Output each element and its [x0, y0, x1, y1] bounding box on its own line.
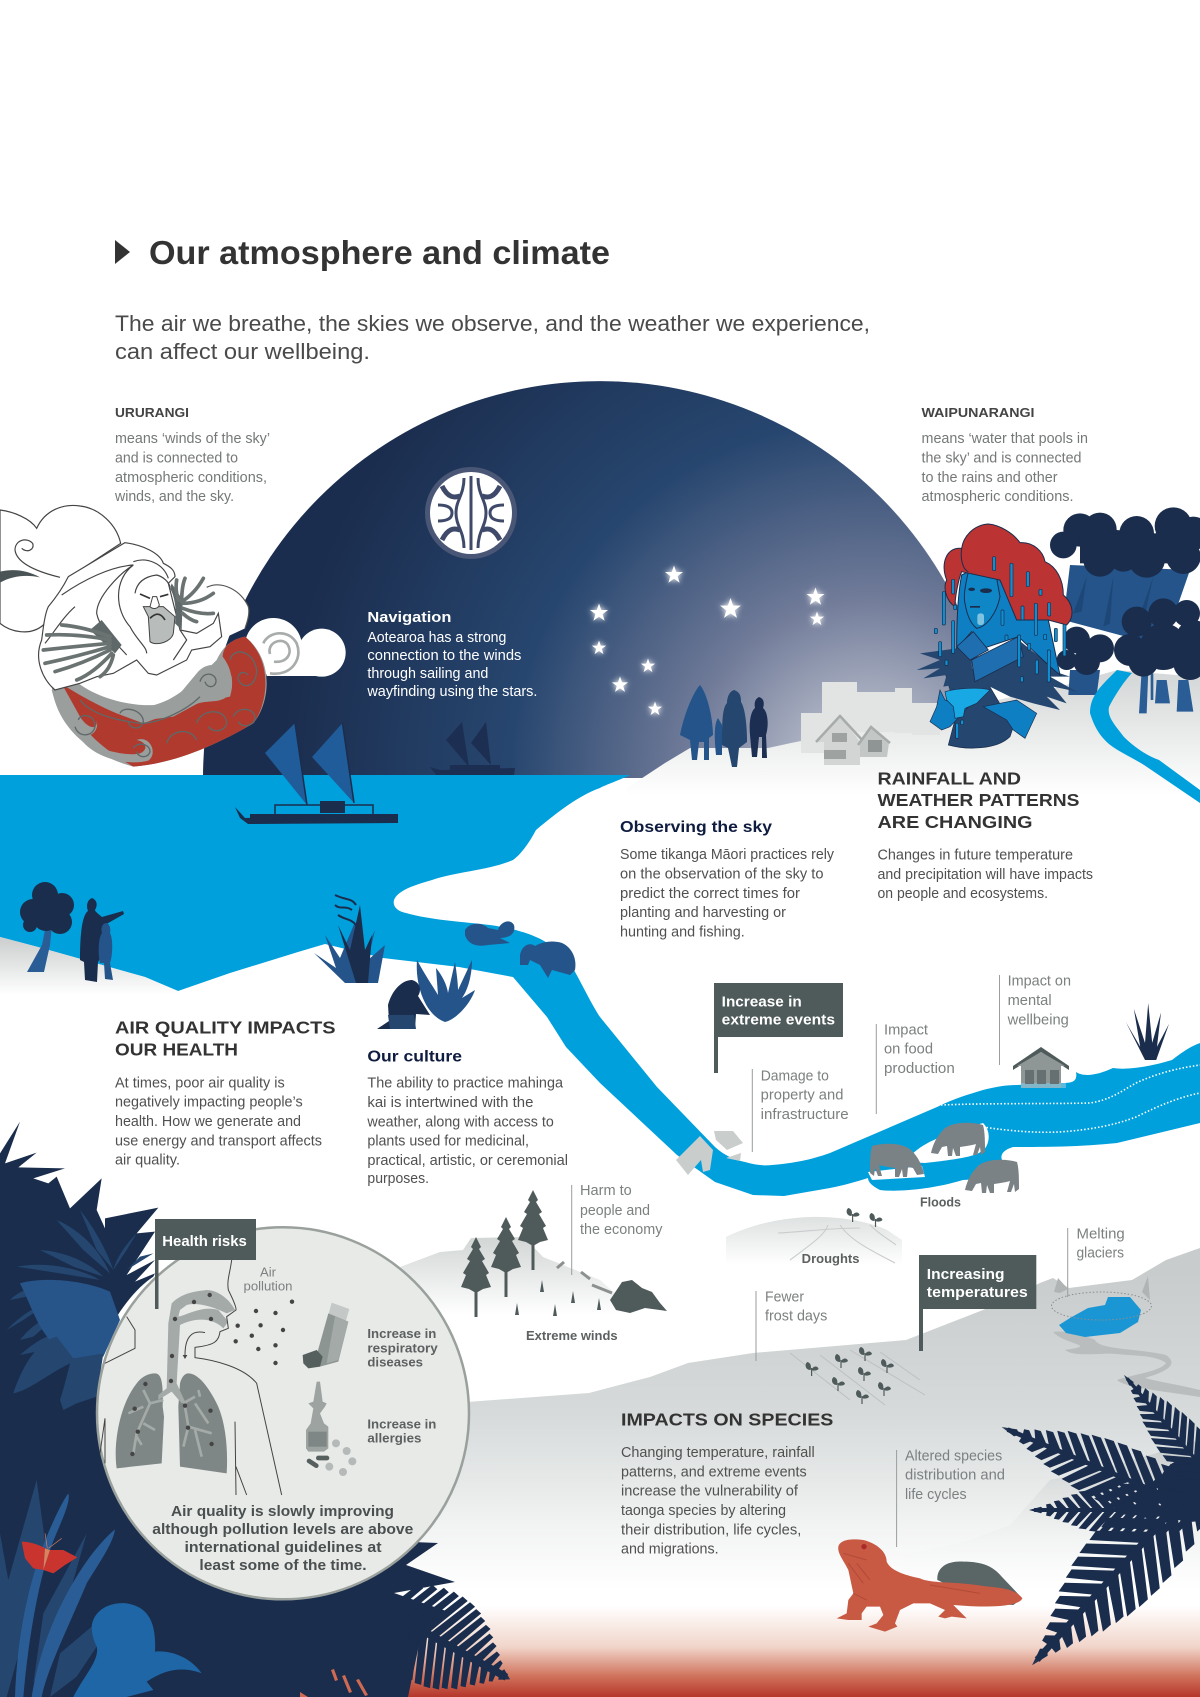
Rainfall heading and text: WEATHER PATTERNS: [878, 790, 1080, 810]
annotation: damage: Damage to: [761, 1068, 829, 1084]
large leaf: [20, 1280, 120, 1358]
Ururangi text: URURANGI: [115, 405, 189, 420]
side labels: Increase in: [367, 1418, 436, 1432]
flax by river: [1126, 1003, 1169, 1060]
Ururangi text: and is connected to: [115, 450, 238, 466]
Impacts on species text: and migrations.: [621, 1542, 719, 1558]
Ururangi text: atmospheric conditions,: [115, 470, 267, 486]
Our culture text: The ability to practice mahinga: [367, 1076, 564, 1092]
lower leaf: [13, 1337, 103, 1410]
key message: international guidelines at: [184, 1539, 382, 1556]
health risks circle: [97, 1227, 469, 1599]
Navigation text: wayfinding using the stars.: [366, 684, 537, 700]
Impacts on species text: patterns, and extreme events: [621, 1464, 807, 1480]
flag: increase in extreme events: extreme events: [722, 1012, 835, 1028]
rain streaks: [1073, 577, 1153, 633]
inhaler: [303, 1303, 349, 1368]
Air quality heading and text: OUR HEALTH: [115, 1040, 238, 1060]
man pointing: [80, 898, 124, 982]
harakeke flax: [314, 895, 385, 983]
key message: least some of the time.: [199, 1557, 367, 1574]
Our culture text: weather, along with access to: [366, 1114, 554, 1130]
Air quality heading and text: use energy and transport affects: [115, 1133, 322, 1149]
melting glacier and stream: [1052, 1276, 1200, 1397]
pine trees in wind: [461, 1190, 667, 1317]
crescent wave red: [63, 637, 265, 767]
label: droughts: Droughts: [802, 1252, 860, 1266]
cloak: [943, 667, 1013, 748]
annotation: frost: Fewer: [765, 1289, 804, 1305]
left cloud: [0, 505, 121, 632]
blue hair: [957, 572, 1060, 675]
Our culture text: plants used for medicinal,: [367, 1134, 529, 1150]
body and hair: [39, 543, 222, 690]
Air quality heading and text: AIR QUALITY IMPACTS: [115, 1018, 336, 1038]
tail stroke: [0, 570, 40, 583]
Navigation text: [366, 609, 537, 700]
flag: increase in extreme events: Increase in: [722, 994, 802, 1010]
river islands: [868, 1123, 989, 1180]
ground, upper right: [627, 670, 1200, 805]
family observing the sky: [680, 685, 768, 767]
flag: health risks: [155, 1219, 256, 1309]
Navigation text: connection to the winds: [367, 648, 521, 664]
crescent gray patches: [52, 665, 232, 762]
flag: increase in extreme events: [714, 983, 843, 1073]
Waipunarangi text: atmospheric conditions.: [922, 489, 1074, 505]
tuatara on rock: [837, 1539, 1022, 1632]
arrow of breath: [183, 1355, 187, 1359]
Observing the sky text: on the observation of the sky to: [620, 866, 824, 882]
annotation: food: on food: [884, 1042, 933, 1058]
annotation: species: Altered species: [905, 1448, 1002, 1464]
drought seedlings: [847, 1208, 882, 1227]
fallen tree: [610, 1280, 667, 1313]
thin river right: [1090, 670, 1200, 803]
side labels: [367, 1327, 438, 1446]
main lower land: [400, 1248, 1200, 1600]
key message: [152, 1503, 413, 1574]
rain shaft: [1063, 565, 1190, 647]
Navigation text: Navigation: [367, 609, 451, 626]
wind deity Tawhirimatea: [0, 505, 346, 767]
moth: [22, 1533, 77, 1573]
forest canopy spikes: [0, 1122, 158, 1440]
Rainfall heading and text: [878, 768, 1093, 902]
Observing the sky text: predict the correct times for: [620, 886, 800, 902]
annotation: food: production: [884, 1061, 955, 1077]
right cloud: [197, 583, 346, 677]
Impacts on species text: Changing temperature, rainfall: [621, 1445, 815, 1461]
tuatara body: [837, 1539, 1022, 1632]
air pollution label: Air: [260, 1266, 276, 1280]
annotation: glaciers: [1067, 1226, 1125, 1297]
tree: [27, 925, 52, 972]
trees right: [1114, 598, 1200, 680]
flag: increasing temperatures: Increasing: [927, 1267, 1004, 1283]
left feathers: [917, 647, 973, 687]
Air quality heading and text: [115, 1018, 336, 1169]
Air quality heading and text: air quality.: [115, 1153, 180, 1169]
storm cloud: [1050, 507, 1200, 578]
Our culture text: practical, artistic, or ceremonial: [367, 1153, 568, 1169]
Observing the sky text: hunting and fishing.: [620, 924, 745, 940]
dark hair bands: [90, 583, 183, 653]
side labels: diseases: [367, 1356, 423, 1370]
spiky fronds: [7, 1210, 153, 1355]
apartment buildings: [801, 682, 940, 753]
windy hill: [400, 1237, 640, 1315]
annotation: mental wellbeing: mental: [1008, 993, 1052, 1009]
Observing the sky text: planting and harvesting or: [620, 905, 786, 921]
round leaf: [73, 1603, 202, 1697]
annotation: mental wellbeing: [999, 974, 1071, 1065]
Impacts on species text: IMPACTS ON SPECIES: [621, 1410, 833, 1430]
houses: [816, 716, 890, 765]
people gathering from river: [465, 921, 575, 978]
red hair: [944, 524, 1072, 625]
adult centre: [722, 690, 747, 767]
tree trunks: [1068, 670, 1193, 713]
drought hill: [726, 1217, 902, 1265]
emblem: [425, 467, 517, 559]
Our culture text: [366, 1048, 568, 1187]
side labels: respiratory: [367, 1342, 438, 1356]
Waipunarangi text: [922, 405, 1088, 505]
collar: [957, 632, 1023, 682]
Navigation text: Aotearoa has a strong: [367, 630, 506, 646]
cloud swirl: [15, 540, 60, 577]
annotation: damage: property and: [761, 1088, 843, 1104]
Air quality heading and text: health. How we generate and: [115, 1114, 301, 1130]
Our culture text: purposes.: [367, 1171, 429, 1187]
hair strands: [45, 560, 187, 660]
pollution particles: [234, 1300, 294, 1365]
dark leaf lobes: [50, 1627, 157, 1697]
brow and mouth: [140, 594, 168, 620]
child: [715, 718, 722, 755]
frost seedlings field: [790, 1347, 925, 1405]
annotation: glaciers: Melting: [1076, 1226, 1125, 1242]
dreadlocks: [43, 578, 213, 680]
rain goddess Waipunarangi: [917, 524, 1077, 748]
key message: although pollution levels are above: [152, 1521, 413, 1538]
Observing the sky text: Observing the sky: [620, 819, 772, 836]
Rainfall heading and text: ARE CHANGING: [878, 812, 1032, 832]
dark forest bottom left: [0, 1400, 455, 1697]
annotation: frost: [756, 1289, 827, 1361]
stars: [590, 565, 825, 715]
annotation: frost: frost days: [765, 1309, 827, 1325]
drips: [934, 557, 1066, 738]
storm, rain and trees: [1050, 507, 1200, 713]
Waipunarangi text: WAIPUNARANGI: [922, 405, 1034, 420]
flooded house: [1013, 1047, 1069, 1088]
bronchi: [128, 1390, 212, 1457]
intro text: The air we breathe, the skies we observe, and the weather we experience,: [115, 311, 870, 336]
Impacts on species text: taonga species by altering: [621, 1503, 786, 1519]
label: extreme winds: Extreme winds: [526, 1329, 618, 1343]
broken road: [676, 1131, 743, 1175]
side labels: Increase in: [367, 1327, 436, 1341]
trees behind goddess: [1057, 627, 1114, 675]
child: [99, 923, 113, 980]
ground, left shore: [0, 937, 178, 1000]
pills: [306, 1439, 356, 1476]
annotation: species: life cycles: [905, 1487, 967, 1503]
crescent spirals: [75, 652, 257, 757]
adult in cloak: [680, 685, 713, 760]
arms: [930, 690, 1037, 738]
Waipunarangi text: means ‘water that pools in: [922, 431, 1088, 447]
Our culture text: kai is intertwined with the: [367, 1095, 533, 1111]
air pollution label: [244, 1266, 293, 1294]
airways: [158, 1290, 235, 1403]
dark blades: [0, 1480, 87, 1697]
crescent wave gray: [52, 637, 267, 767]
right feathers: [980, 638, 1077, 710]
Waipunarangi text: to the rains and other: [922, 470, 1058, 486]
Ururangi text: [114, 405, 270, 505]
kneeling person with flax: [377, 960, 475, 1029]
tree fern right: [990, 1360, 1200, 1694]
tuatara details: [843, 1553, 980, 1600]
lungs and airway: [100, 1260, 356, 1495]
tree and father and child: [20, 882, 124, 982]
fern bottom left: [361, 1567, 534, 1697]
cows: [870, 1123, 1019, 1193]
Impacts on species text: their distribution, life cycles,: [621, 1522, 801, 1538]
red fern fragments: [300, 1669, 368, 1697]
Rainfall heading and text: RAINFALL AND: [878, 768, 1021, 788]
annotation: harm: Harm to: [580, 1183, 632, 1199]
Impacts on species text: increase the vulnerability of: [621, 1484, 799, 1500]
face: [143, 607, 175, 644]
Air quality heading and text: negatively impacting people’s: [115, 1095, 303, 1111]
annotation: mental wellbeing: wellbeing: [1007, 1012, 1069, 1028]
Rainfall heading and text: Changes in future temperature: [878, 848, 1073, 864]
night sky dome: [203, 381, 997, 778]
red ground gradient: [0, 1606, 1200, 1697]
felled stumps: [515, 1280, 601, 1316]
spiral: [263, 633, 298, 674]
annotation: glaciers: glaciers: [1076, 1246, 1124, 1262]
flag: increasing temperatures: temperatures: [927, 1285, 1028, 1301]
Observing the sky text: [620, 819, 835, 940]
annotation: mental wellbeing: Impact on: [1008, 974, 1071, 990]
annotation: food: Impact: [884, 1022, 928, 1038]
annotation: harm: people and: [580, 1203, 650, 1219]
annotation: damage: infrastructure: [761, 1107, 849, 1123]
key message: Air quality is slowly improving: [171, 1503, 394, 1520]
Observing the sky text: Some tikanga Māori practices rely: [620, 847, 835, 863]
sea and river: [0, 775, 1200, 1196]
Our culture text: Our culture: [367, 1048, 462, 1066]
body outline: [100, 1260, 282, 1495]
light blades: [15, 1493, 115, 1697]
annotation: food: [876, 1022, 955, 1114]
side labels: allergies: [367, 1432, 421, 1446]
Rainfall heading and text: on people and ecosystems.: [878, 886, 1048, 902]
plants and moth bottom left: [0, 1480, 202, 1697]
section title arrow: [115, 240, 130, 264]
distant mountain: [905, 1440, 1200, 1570]
face: [964, 572, 1000, 628]
annotation: species: distribution and: [905, 1468, 1005, 1484]
Rainfall heading and text: and precipitation will have impacts: [878, 867, 1093, 883]
Navigation text: through sailing and: [367, 666, 488, 682]
Ururangi text: winds, and the sky.: [114, 489, 234, 505]
annotation: harm: [571, 1183, 663, 1275]
eyes and moko: [968, 588, 992, 608]
adult right: [750, 697, 768, 758]
flag: increasing temperatures: [919, 1255, 1036, 1351]
Ururangi text: means ‘winds of the sky’: [115, 431, 270, 447]
Air quality heading and text: At times, poor air quality is: [115, 1075, 285, 1091]
lungs: [116, 1373, 227, 1473]
small waka: [430, 722, 515, 775]
annotation: harm: the economy: [580, 1222, 663, 1238]
flag: health risks: Health risks: [162, 1234, 247, 1250]
particles in the body: [130, 1293, 214, 1456]
Impacts on species text: [621, 1410, 833, 1558]
air pollution label: pollution: [244, 1280, 293, 1294]
intro text: [115, 311, 870, 364]
title: Our atmosphere and climate: [149, 234, 610, 271]
nose: [150, 597, 159, 608]
annotation: damage: [752, 1068, 849, 1152]
intro text: can affect our wellbeing.: [115, 339, 370, 364]
label: floods: Floods: [920, 1196, 961, 1210]
large waka: [235, 723, 398, 824]
cupped water: [945, 688, 990, 718]
annotation: species: [896, 1448, 1005, 1547]
flood dotted lines: [941, 1065, 1200, 1132]
rock: [937, 1562, 1022, 1605]
Waipunarangi text: the sky’ and is connected: [922, 450, 1082, 466]
nasal spray: [306, 1382, 328, 1452]
